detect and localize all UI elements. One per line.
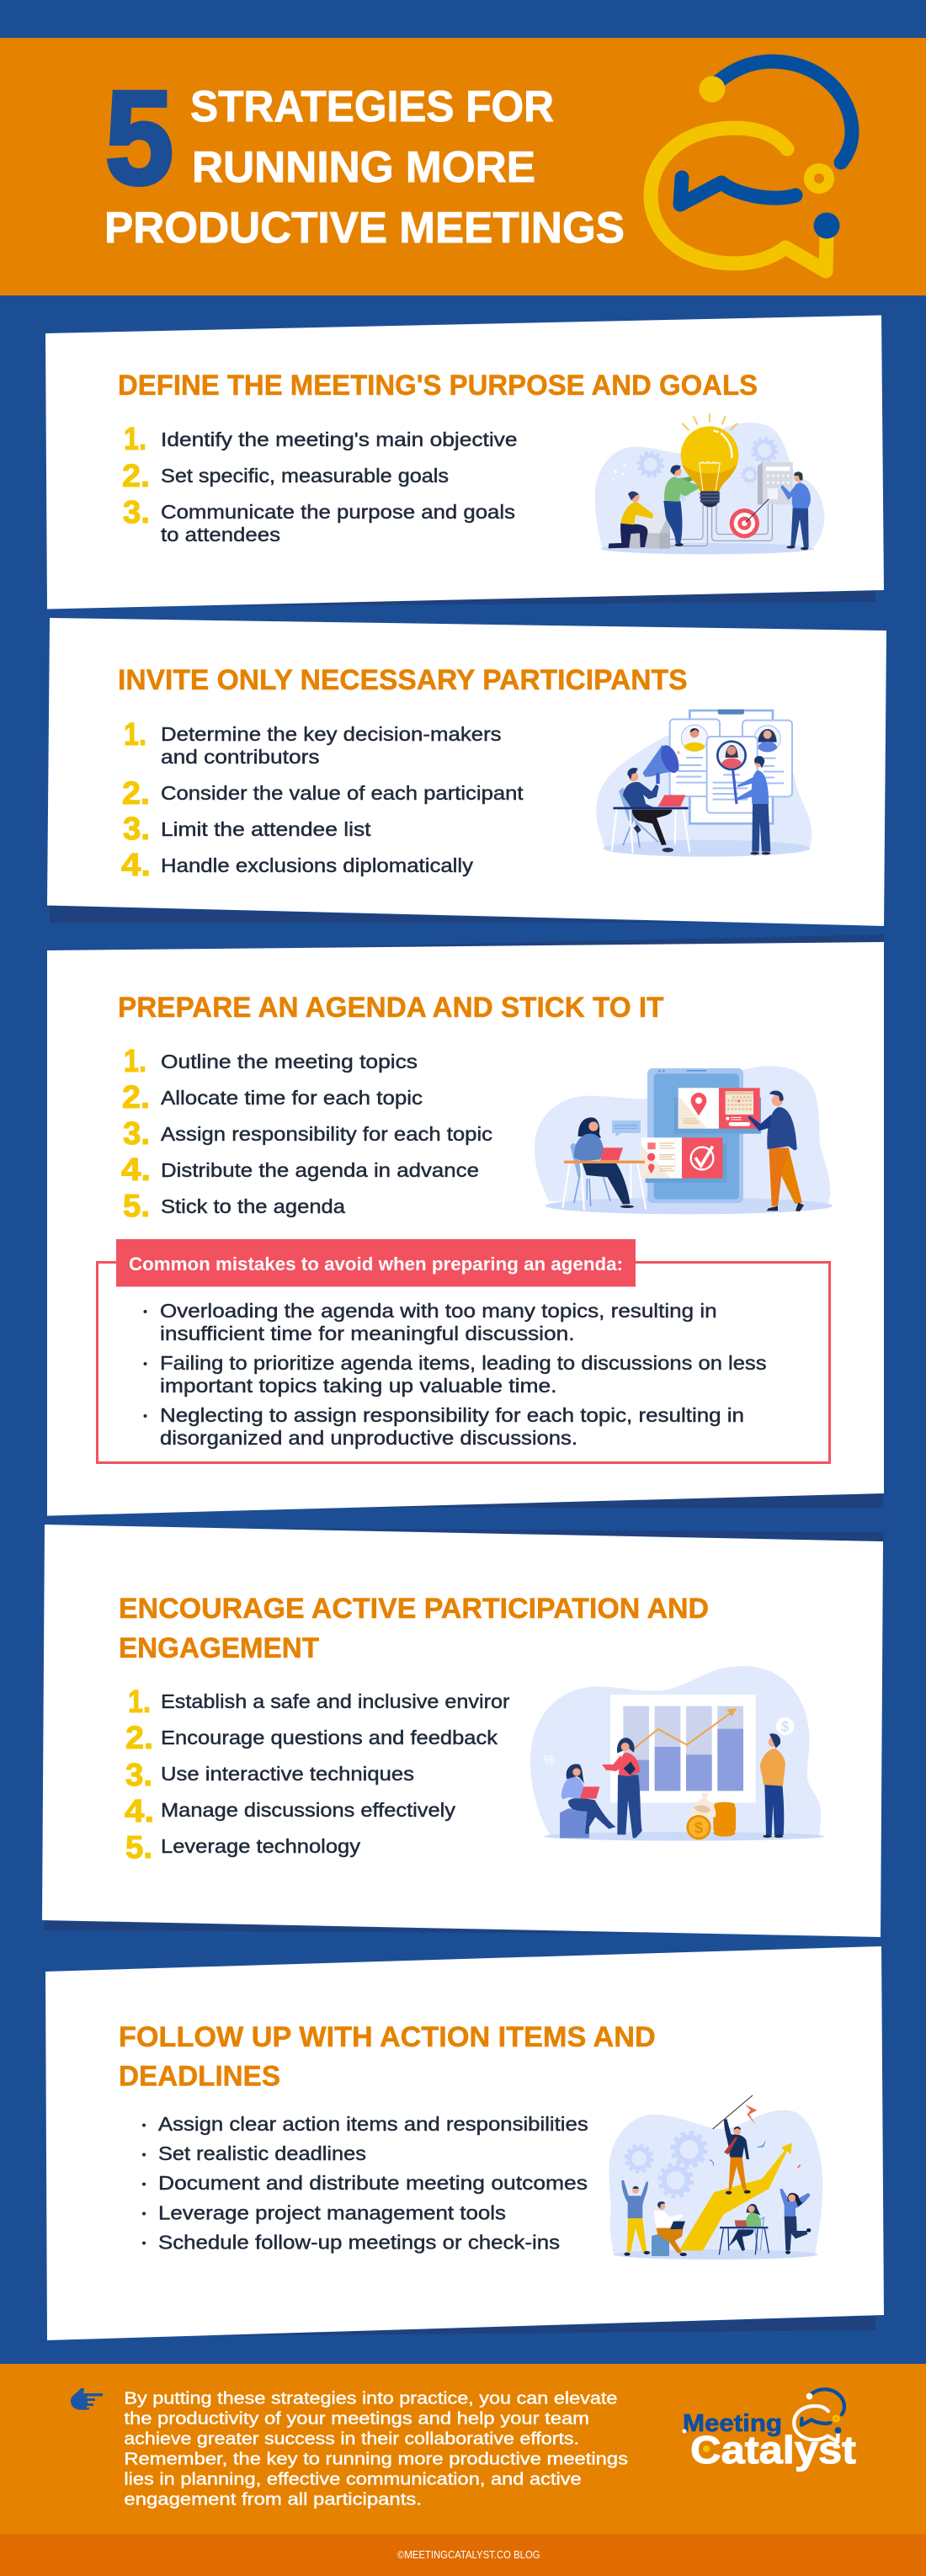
closing paragraph: engagement from all participants. (124, 2490, 422, 2509)
numbered list: Communicate the purpose and goals (161, 501, 515, 523)
bullet list: insufficient time for meaningful discussion. (160, 1323, 575, 1344)
heading: ENGAGEMENT (119, 1632, 319, 1664)
logo: Meeting Catalyst: Meeting (683, 2410, 782, 2437)
numbered list: 1. (124, 422, 146, 457)
icon: pointing hand (71, 2388, 103, 2410)
numbered list: 3. (123, 495, 150, 530)
illustration: team reviewing chart: $ (781, 1719, 789, 1735)
numbered list: 2. (125, 1721, 153, 1756)
heading: INVITE ONLY NECESSARY PARTICIPANTS (118, 664, 687, 696)
numbered list: Distribute the agenda in advance (161, 1159, 479, 1181)
card background (45, 315, 884, 609)
bullet list (143, 1300, 766, 1449)
panel: encourage participation (42, 1525, 884, 1937)
numbered list: 1. (124, 717, 146, 753)
big number 5: 5 (105, 64, 173, 212)
callout: common mistakes (98, 1239, 830, 1463)
numbered list: 5. (123, 1189, 150, 1224)
numbered list: Encourage questions and feedback (161, 1727, 498, 1748)
illustration: team celebrating on rising arrow (609, 2095, 822, 2259)
panel: define purpose and goals (45, 315, 884, 609)
numbered list: Handle exclusions diplomatically (161, 854, 474, 876)
numbered list: Leverage technology (161, 1835, 361, 1857)
card background (45, 1946, 884, 2340)
numbered list: 1. (124, 1044, 146, 1079)
illustration: agenda on tablet (535, 1066, 833, 1214)
numbered list: Allocate time for each topic (161, 1087, 423, 1109)
numbered list: 3. (123, 1116, 150, 1152)
card background (42, 1525, 883, 1937)
numbered list (121, 717, 524, 883)
callout label (116, 1239, 636, 1286)
numbered list: 3. (123, 812, 150, 847)
panel: invite necessary participants (47, 618, 886, 926)
bullet list: Overloading the agenda with too many topics, resulting in (160, 1300, 717, 1322)
heading: PREPARE AN AGENDA AND STICK TO IT (118, 992, 664, 1024)
heading: DEADLINES (119, 2060, 280, 2092)
logo: Meeting Catalyst (682, 2389, 856, 2472)
numbered list: 5. (125, 1830, 152, 1865)
bullet list: Assign clear action items and responsibilities (158, 2113, 588, 2135)
bullet list: Failing to prioritize agenda items, leading to discussions on less (160, 1352, 766, 1374)
illustration: team reviewing chart (530, 1666, 824, 1841)
numbered list (122, 422, 517, 546)
illustration: team reviewing chart: $ (694, 1819, 704, 1837)
bullet list: disorganized and unproductive discussions. (160, 1427, 577, 1449)
numbered list: Use interactive techniques (161, 1763, 414, 1785)
illustration: reviewing candidate profiles (596, 710, 812, 857)
numbered list: 4. (125, 1794, 154, 1829)
bullet list: Leverage project management tools (158, 2201, 506, 2223)
numbered list: 4. (121, 848, 151, 883)
closing paragraph: lies in planning, effective communication, and active (124, 2470, 582, 2488)
illustration: team reviewing chart: % (544, 1754, 556, 1768)
numbered list: 2. (122, 459, 150, 494)
numbered list: Set specific, measurable goals (161, 465, 449, 487)
numbered list: to attendees (161, 524, 280, 546)
bullet list: Set realistic deadlines (158, 2142, 366, 2164)
icon: speech bubble logo (651, 61, 852, 271)
numbered list: Identify the meeting's main objective (161, 428, 517, 450)
numbered list (121, 1044, 492, 1224)
numbered list: 2. (122, 1080, 150, 1115)
numbered list: Outline the meeting topics (161, 1051, 418, 1072)
heading: FOLLOW UP WITH ACTION ITEMS AND (119, 2021, 656, 2053)
numbered list: Determine the key decision-makers (161, 723, 502, 745)
header band (0, 38, 926, 295)
numbered list: Consider the value of each participant (161, 782, 524, 804)
bullet list: Schedule follow-up meetings or check-ins (158, 2231, 560, 2253)
panel: follow up with action items (45, 1946, 884, 2340)
numbered list: 4. (121, 1152, 151, 1188)
closing paragraph: the productivity of your meetings and help your team (124, 2410, 589, 2429)
copyright bar (0, 2534, 926, 2576)
numbered list (125, 1685, 510, 1865)
closing paragraph: achieve greater success in their collaborative efforts. (124, 2430, 579, 2448)
logo: Meeting Catalyst: Catalyst (690, 2428, 856, 2472)
numbered list: Establish a safe and inclusive enviror (161, 1690, 510, 1712)
bullet list (142, 2113, 588, 2253)
bullet list: Neglecting to assign responsibility for each topic, resulting in (160, 1404, 744, 1426)
illustration: team around light bulb (595, 414, 824, 554)
callout: common mistakes: Common mistakes to avoid when preparing an agenda: (129, 1253, 623, 1275)
numbered list: Limit the attendee list (161, 818, 371, 840)
title: RUNNING MORE (192, 143, 535, 192)
numbered list: and contributors (161, 746, 320, 768)
heading: ENCOURAGE ACTIVE PARTICIPATION AND (119, 1593, 709, 1625)
numbered list: Manage discussions effectively (161, 1799, 456, 1821)
bullet list: Document and distribute meeting outcomes (158, 2172, 588, 2194)
title: PRODUCTIVE MEETINGS (104, 204, 625, 253)
heading: DEFINE THE MEETING'S PURPOSE AND GOALS (118, 370, 758, 402)
numbered list: 3. (125, 1758, 152, 1793)
card background (47, 942, 884, 1516)
numbered list: Assign responsibility for each topic (161, 1123, 492, 1145)
closing paragraph (124, 2390, 628, 2509)
bullet list: important topics taking up valuable time. (160, 1375, 557, 1397)
heading (119, 2021, 656, 2092)
numbered list: 2. (122, 776, 150, 812)
panel: prepare an agenda (47, 934, 884, 1516)
closing paragraph: Remember, the key to running more productive meetings (124, 2450, 628, 2468)
footer summary band (0, 2364, 926, 2535)
heading (119, 1593, 709, 1664)
title: STRATEGIES FOR (190, 82, 554, 131)
numbered list: 1. (128, 1685, 151, 1720)
closing paragraph: By putting these strategies into practice, you can elevate (124, 2390, 617, 2408)
card background (47, 618, 886, 926)
title (104, 82, 625, 253)
numbered list: Stick to the agenda (161, 1195, 345, 1217)
copyright bar: ©MEETINGCATALYST.CO BLOG (397, 2548, 540, 2561)
